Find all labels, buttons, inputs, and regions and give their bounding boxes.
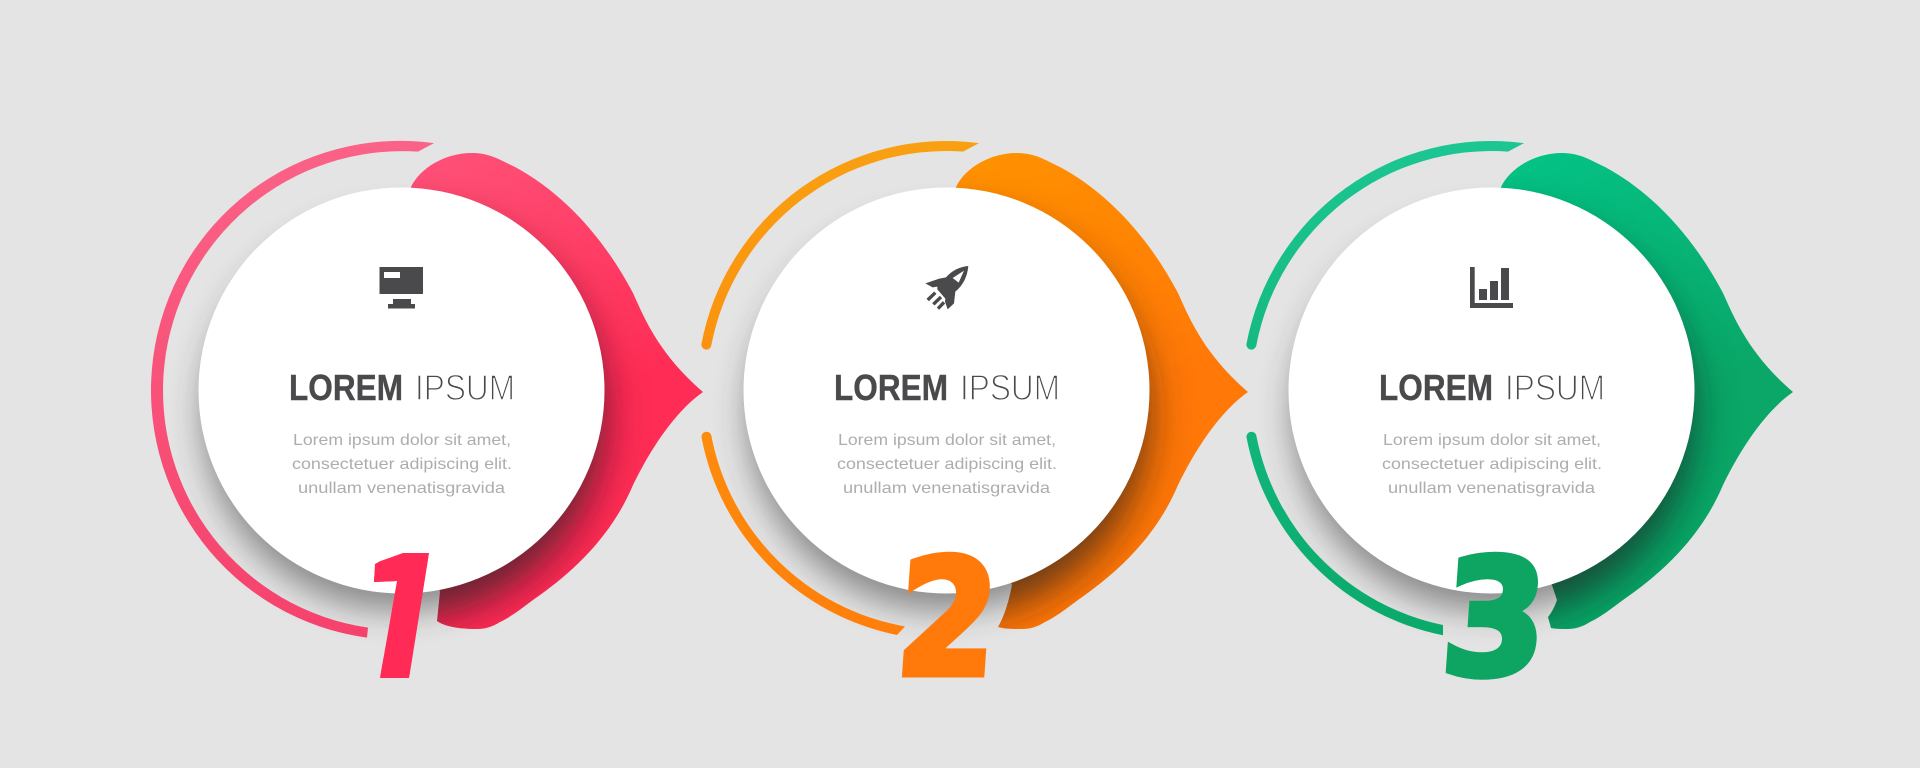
heading: LOREM (289, 367, 403, 408)
ring: pink (151, 141, 434, 638)
body text: unullam venenatisgravida (298, 480, 505, 497)
heading (1379, 367, 1605, 408)
ring: green, top arc (1246, 141, 1524, 350)
panel: step 2 (701, 140, 1265, 712)
body text: unullam venenatisgravida (843, 480, 1050, 497)
white circle (744, 188, 1150, 594)
icon: rocket (925, 266, 968, 309)
icon: bar chart (1470, 267, 1513, 308)
shadow of circle (202, 217, 596, 611)
panel: step 3 (1246, 140, 1810, 712)
body text: Lorem ipsum dolor sit amet, (293, 432, 511, 449)
number 3: 3 (1436, 525, 1553, 712)
body text (292, 432, 512, 497)
white circle (198, 188, 604, 594)
ring: green, bottom arc (1246, 432, 1443, 635)
number 1: 1 (340, 520, 466, 713)
heading: LOREM (834, 367, 948, 408)
shadow of circle (747, 217, 1141, 611)
body text: consectetuer adipiscing elit. (292, 456, 512, 473)
body text: Lorem ipsum dolor sit amet, (1383, 432, 1601, 449)
ring: orange, bottom arc (701, 432, 905, 635)
body text: Lorem ipsum dolor sit amet, (838, 432, 1056, 449)
heading: IPSUM (960, 367, 1060, 408)
blob arrow: pink (411, 153, 703, 629)
body text (837, 432, 1057, 497)
heading (289, 367, 515, 408)
white circle (1288, 188, 1694, 594)
heading: IPSUM (415, 367, 515, 408)
blob arrow: green (1501, 153, 1793, 629)
heading: IPSUM (1505, 367, 1605, 408)
body text (1382, 432, 1602, 497)
heading (834, 367, 1060, 408)
blob arrow: orange (956, 153, 1248, 629)
number 2: 2 (891, 525, 1004, 712)
body text: consectetuer adipiscing elit. (1382, 456, 1602, 473)
shadow of circle (1292, 217, 1686, 611)
body text: consectetuer adipiscing elit. (837, 456, 1057, 473)
panel: step 1 (151, 140, 720, 713)
ring: orange, top arc (701, 141, 979, 350)
icon: monitor (380, 267, 423, 308)
heading: LOREM (1379, 367, 1493, 408)
body text: unullam venenatisgravida (1388, 480, 1595, 497)
